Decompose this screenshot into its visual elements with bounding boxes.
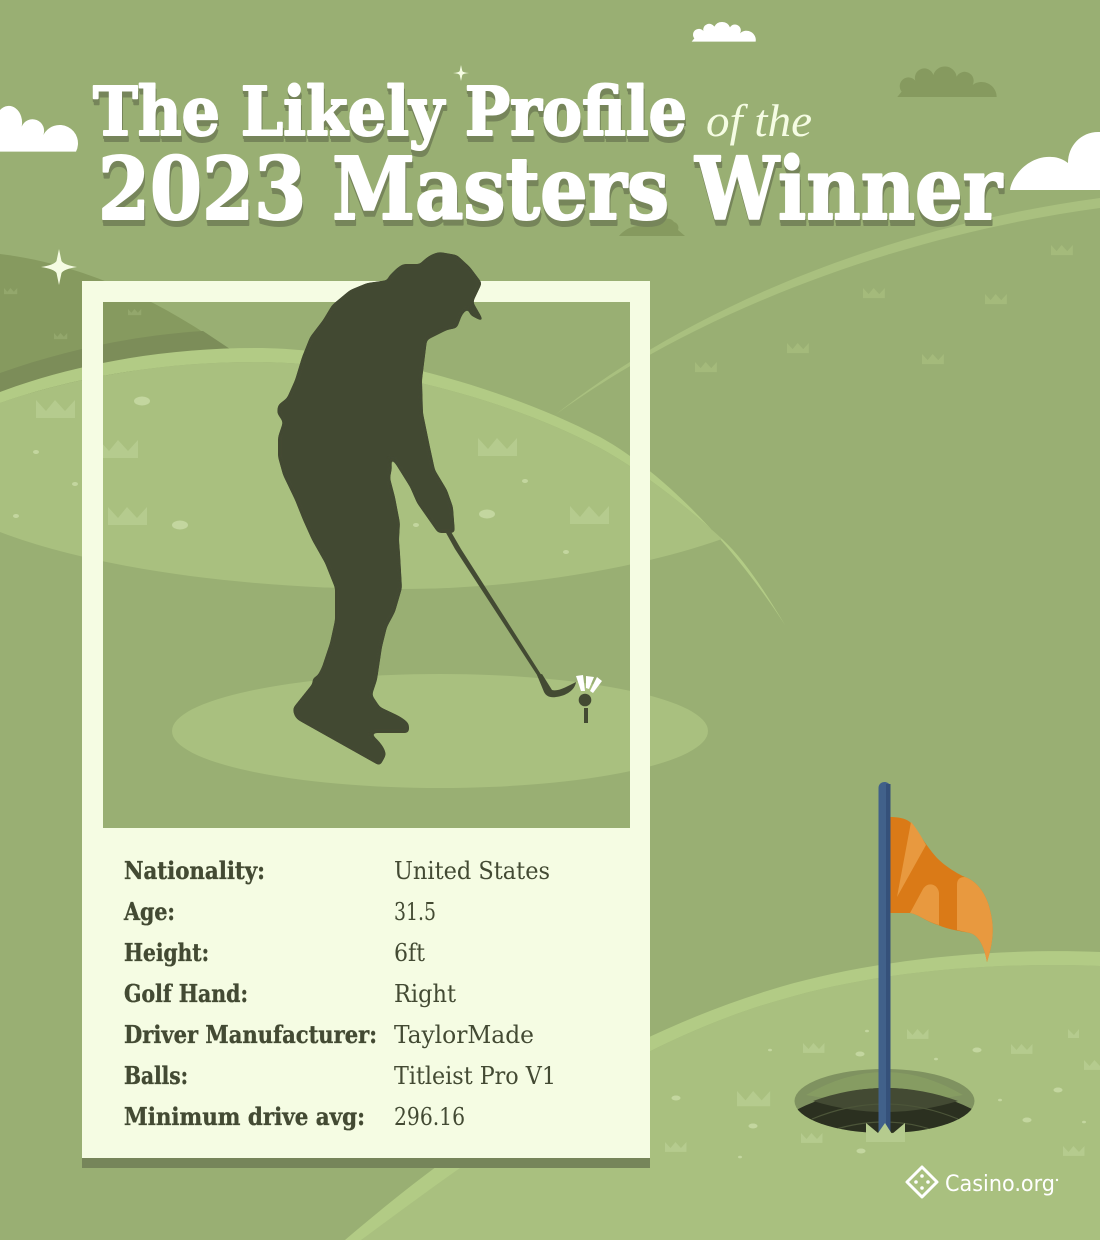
stats table [123, 856, 556, 1131]
title: The Likely Profile [94, 78, 688, 157]
cloud: dark right [897, 67, 997, 97]
grass tuft at hole [866, 1123, 905, 1142]
cloud: right [1010, 132, 1100, 190]
stats table: TaylorMade [394, 1021, 534, 1049]
title: The Likely Profile [93, 72, 687, 151]
stats table: 6ft [394, 939, 425, 967]
cloud: left [0, 106, 78, 152]
golfer silhouette [277, 252, 485, 766]
stats table: United States [394, 857, 550, 885]
stats table: 31.5 [394, 898, 436, 926]
fairway mound [0, 348, 785, 625]
title [93, 72, 1004, 246]
card shadow [82, 1158, 650, 1168]
cloud: dark behind title [619, 219, 685, 236]
cloud: top [692, 22, 756, 42]
flag [890, 817, 993, 962]
stats table: 296.16 [394, 1103, 465, 1131]
stats table: Nationality: [124, 856, 265, 885]
logo: Casino.org [907, 1167, 1058, 1197]
grass tufts [4, 245, 1100, 1156]
golf ball and tee [576, 675, 602, 723]
title: of the [706, 95, 812, 146]
stats table: Titleist Pro V1 [394, 1062, 556, 1090]
darker hill band [0, 331, 230, 400]
stats table: Height: [124, 938, 209, 967]
stats table: Right [394, 980, 456, 1008]
golf hole [794, 1069, 974, 1133]
dark hill top left [0, 254, 230, 400]
sparkle: left [41, 249, 77, 285]
putting green hill [345, 951, 1100, 1240]
stats table: Minimum drive avg: [124, 1102, 365, 1131]
stats table: Age: [123, 897, 175, 926]
golf club [445, 530, 576, 697]
stats table: Driver Manufacturer: [124, 1020, 377, 1049]
card frame [82, 281, 650, 1158]
stats table: Balls: [124, 1061, 188, 1090]
far fairway arc [555, 198, 1100, 415]
pebbles [13, 396, 1086, 1158]
logo: Casino.org: Casino.org [945, 1172, 1055, 1197]
flag pole [878, 782, 890, 1132]
title: The Likely Profile [93, 75, 687, 154]
stats table: Golf Hand: [124, 979, 248, 1008]
sparkle: top [453, 65, 469, 81]
tee ellipse [172, 674, 708, 788]
